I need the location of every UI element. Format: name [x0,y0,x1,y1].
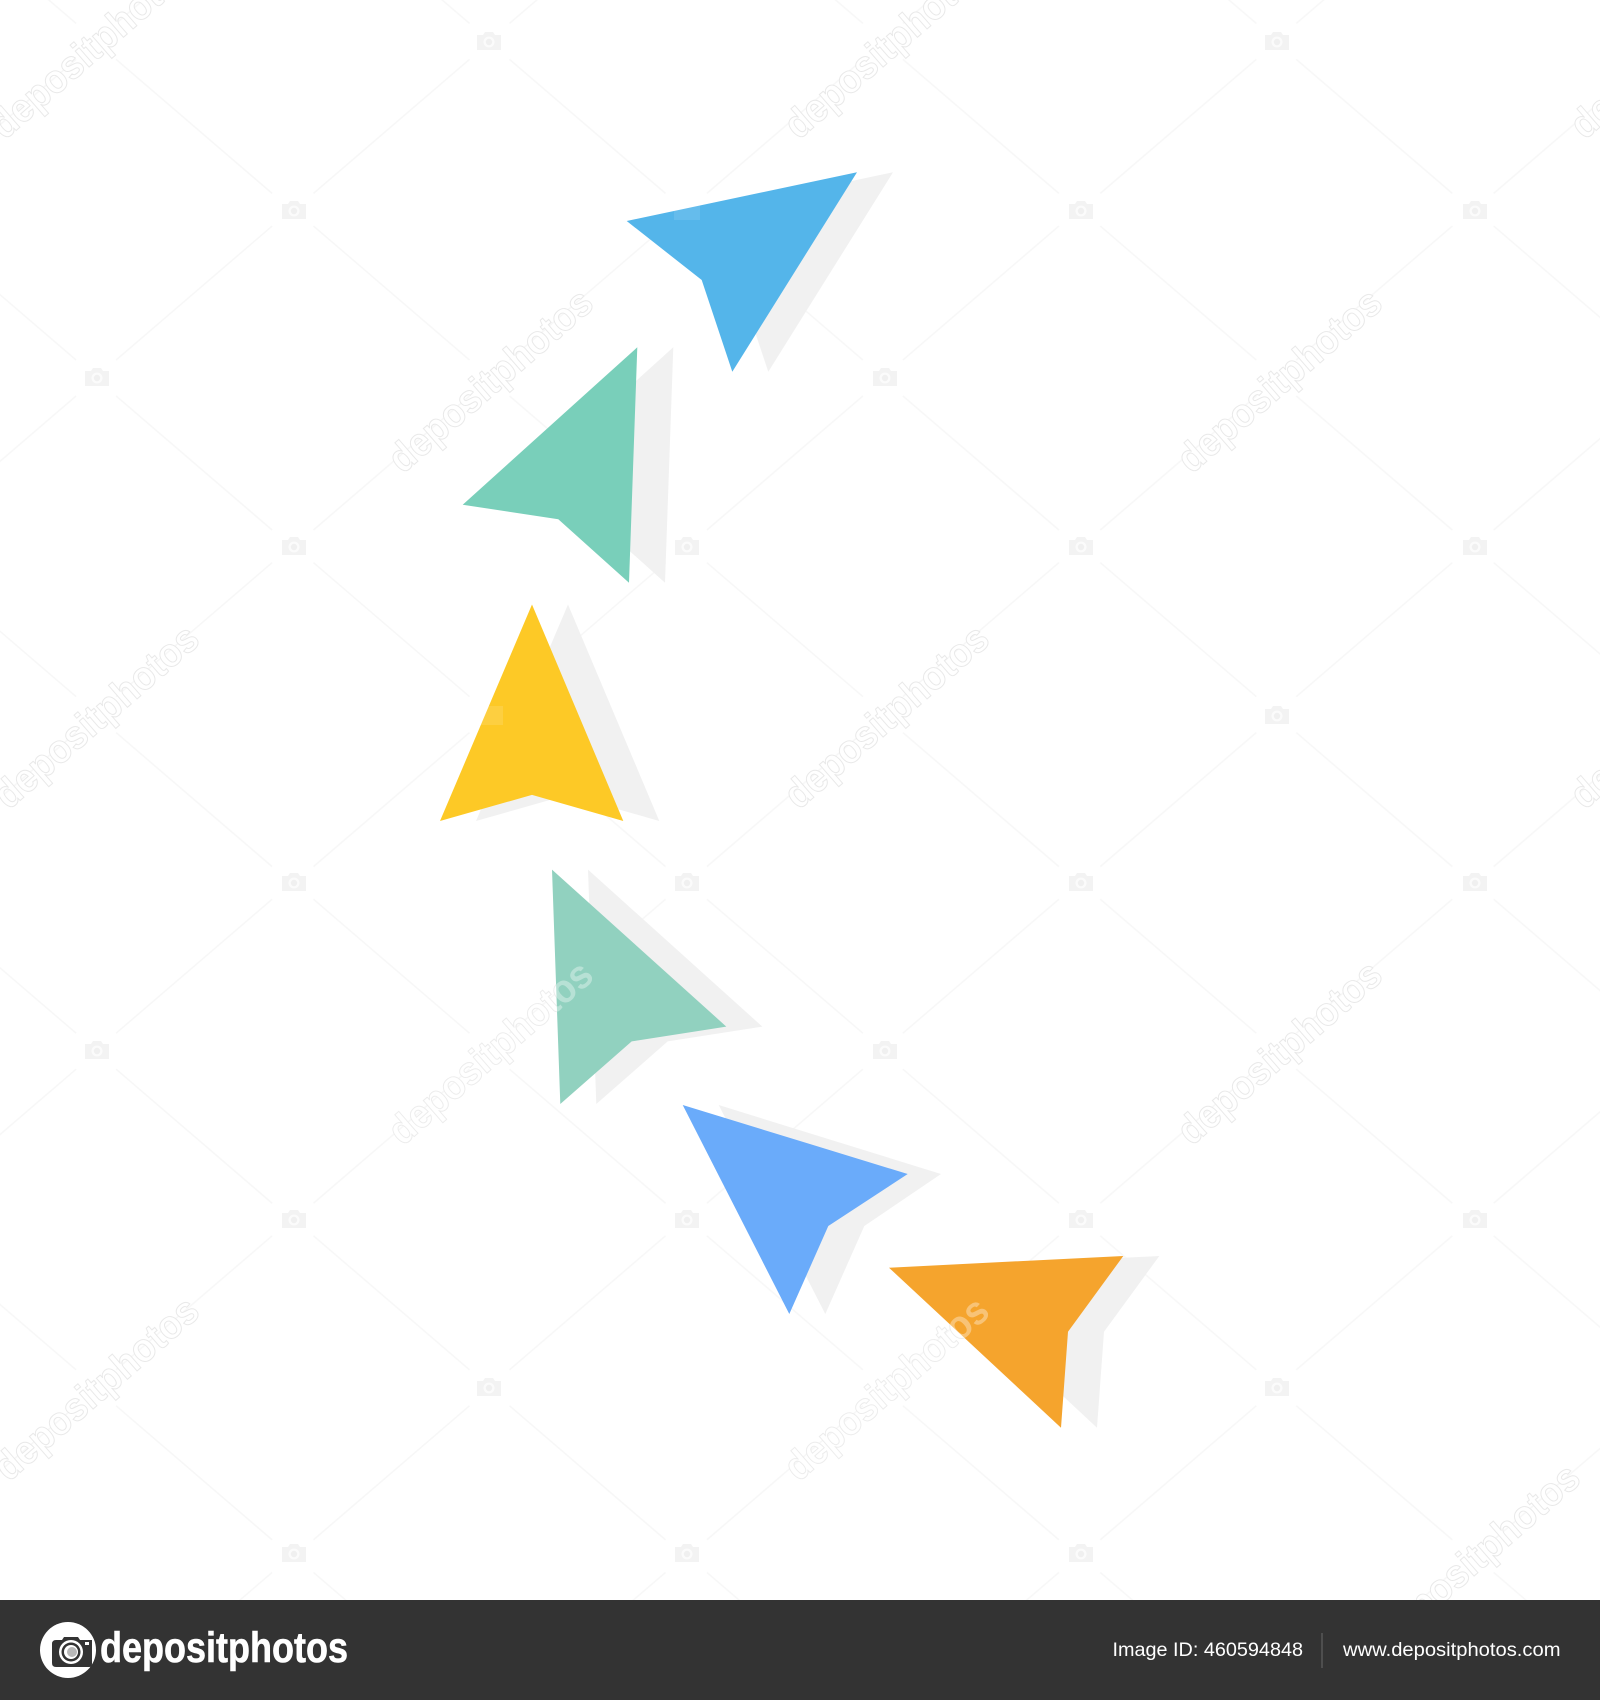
watermark: repeated wordmarks: depositphotos [380,280,602,481]
watermark: repeated wordmarks: depositphotos [776,1288,998,1489]
arrow: light blue [627,172,857,372]
image id: Image ID: 460594848 [1112,1639,1303,1661]
watermark: repeated wordmarks: depositphotos [1367,1455,1589,1656]
divider [1322,1633,1323,1668]
website url: www.depositphotos.com [1342,1639,1560,1661]
arrow: blue [683,1105,908,1314]
watermark overlay on arrows [380,201,998,1489]
arrow: yellow [440,604,623,821]
watermark overlay on arrows: depositphotos [380,952,602,1153]
icon: camera logo [40,1622,96,1678]
watermark: repeated wordmarks: depositphotos [1169,280,1391,481]
watermark: repeated wordmarks: depositphotos [1169,952,1391,1153]
footer bar [0,1600,1600,1700]
arrow: pale teal [552,870,726,1104]
watermark: camera icons [85,32,1487,1562]
logo wordmark: depositphotos [100,1624,348,1672]
arrow shadows [476,172,1159,1428]
watermark: repeated wordmarks: depositphotos [776,616,998,817]
watermark: repeated wordmarks: depositphotos [380,952,602,1153]
arrow: orange [889,1256,1123,1428]
arrow: green teal [463,347,637,583]
watermark overlay on arrows: depositphotos [776,1288,998,1489]
